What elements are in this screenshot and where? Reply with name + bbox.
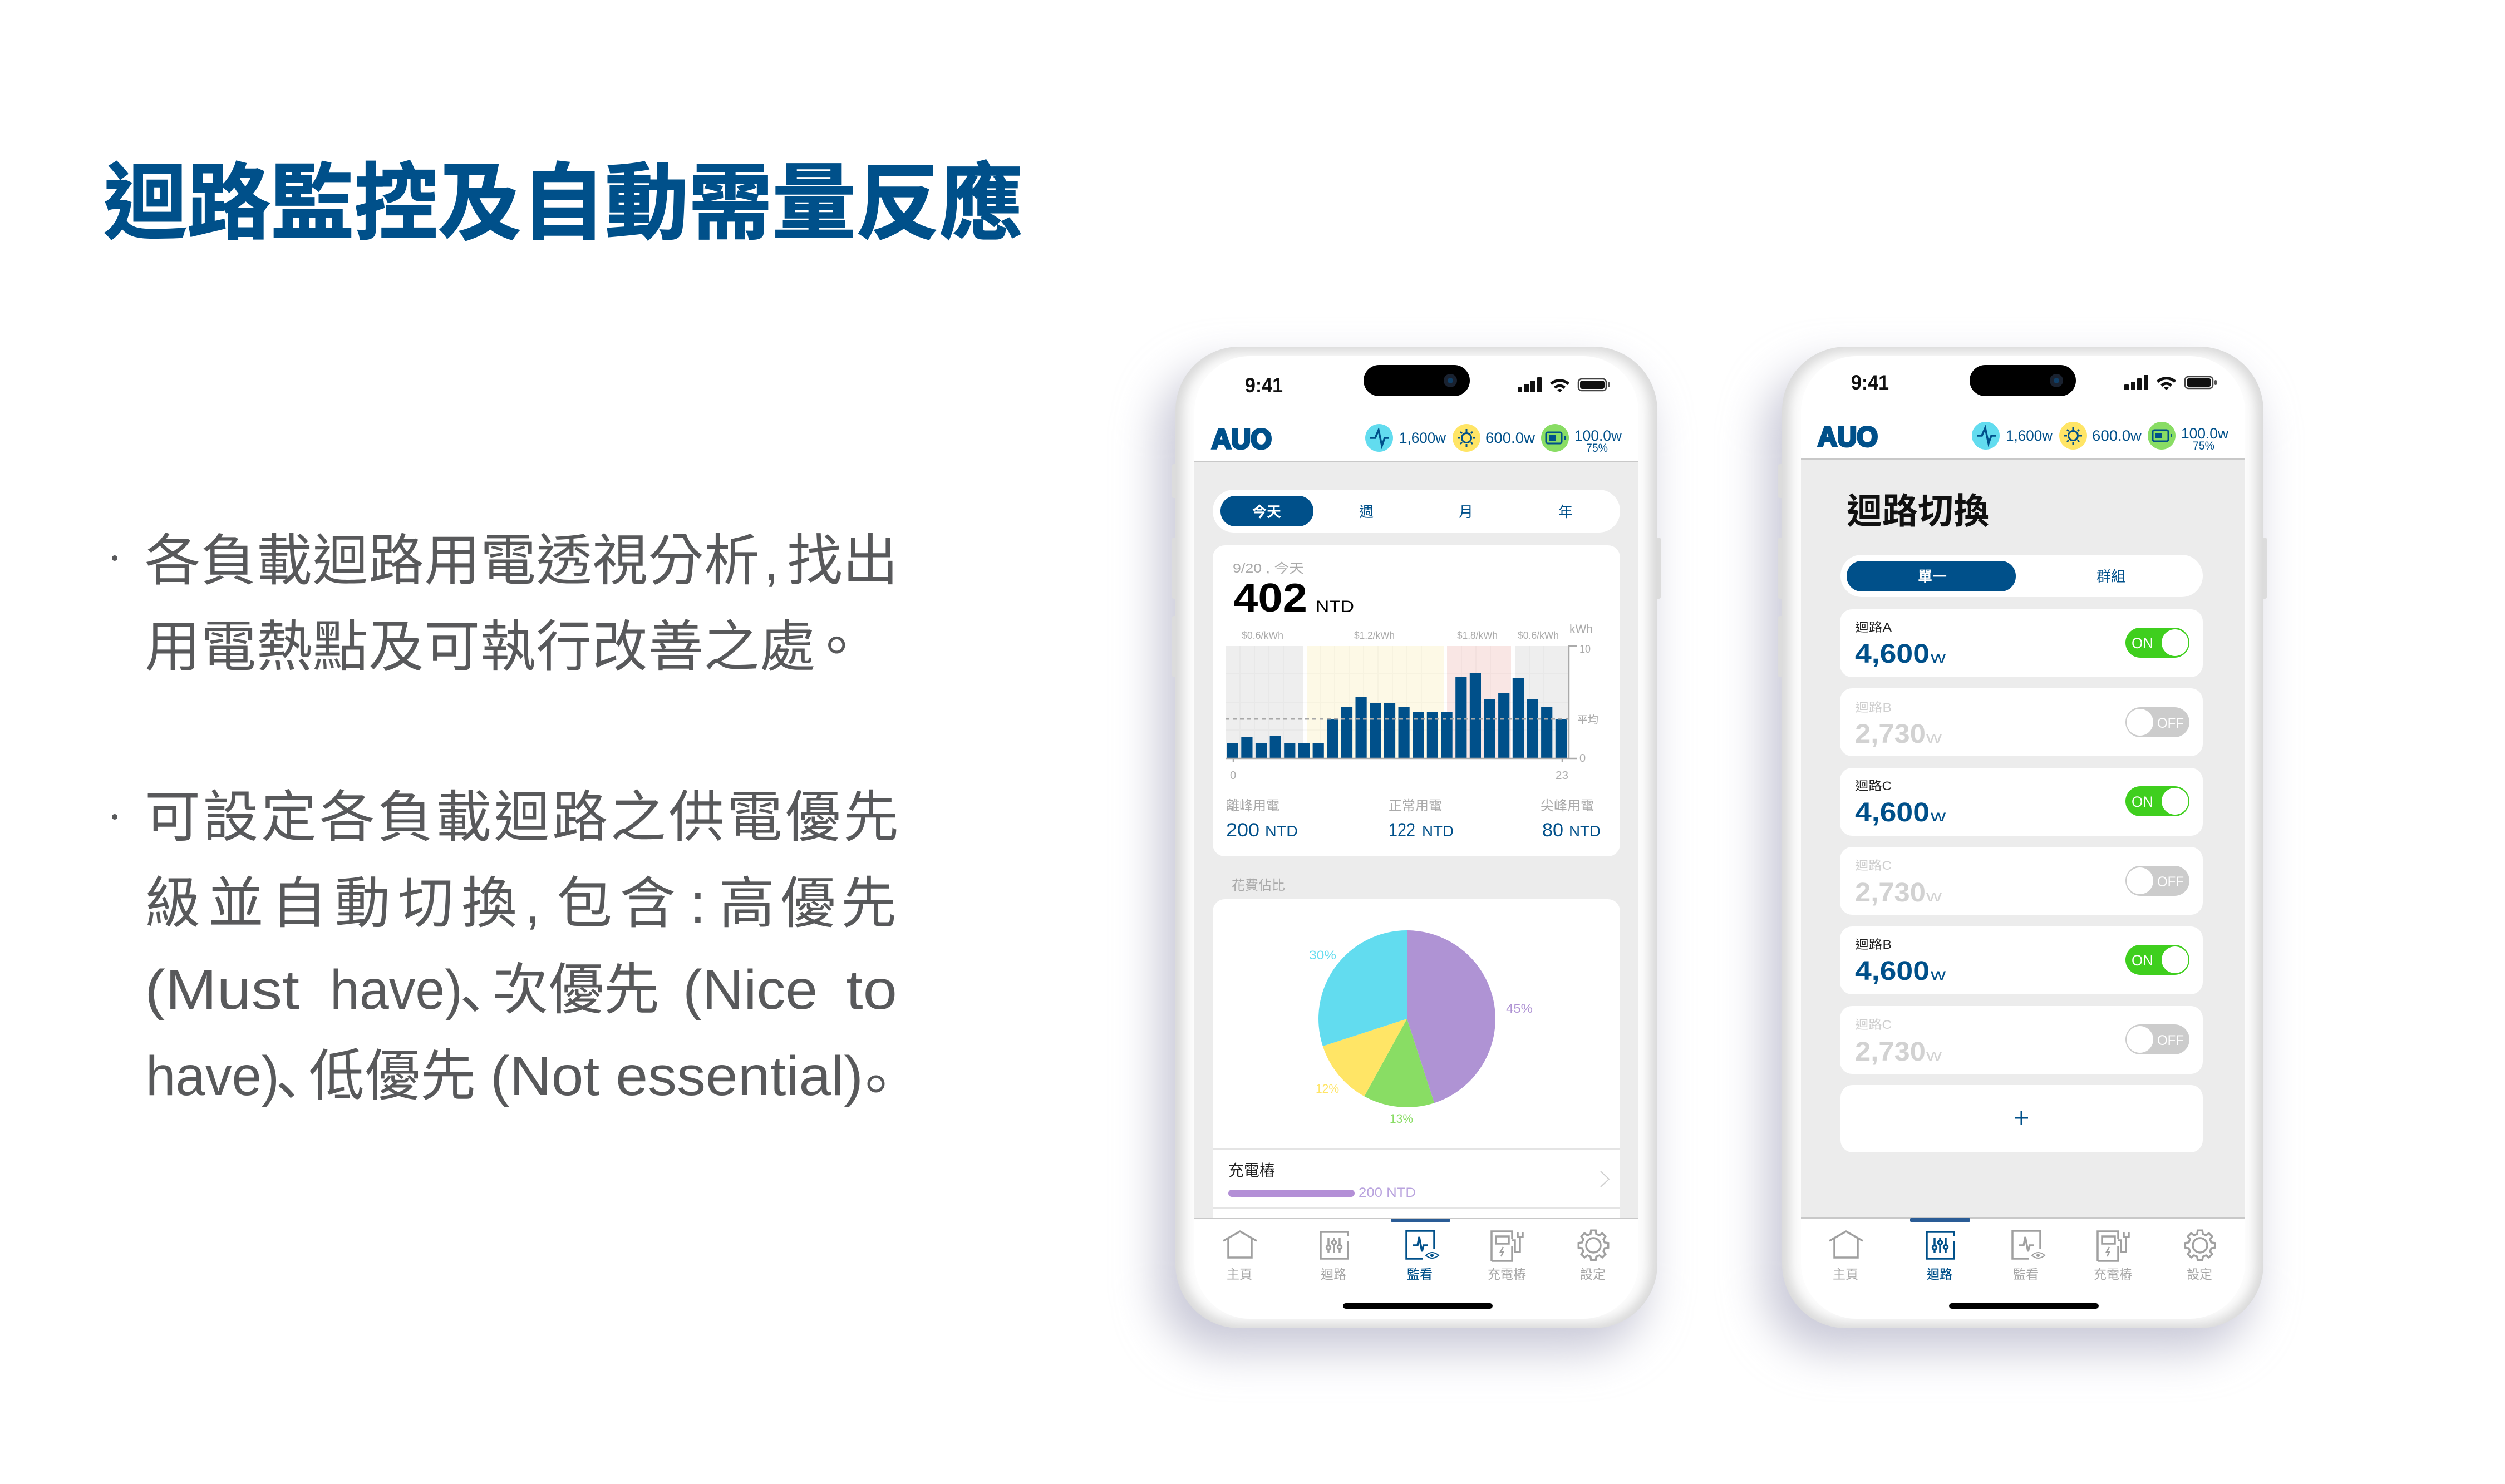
home indicator bbox=[1949, 1303, 2099, 1309]
icon: load pulse bbox=[1972, 422, 2000, 450]
bar chart: 0 bbox=[1230, 770, 1236, 782]
circuit row B off: w bbox=[1926, 728, 1942, 747]
text block: bullet two bbox=[112, 786, 902, 1111]
icon: charger bbox=[1492, 1231, 1523, 1261]
list row: charger bbox=[1213, 1148, 1620, 1209]
icon: monitor bbox=[2012, 1231, 2045, 1259]
toggle on bbox=[2125, 786, 2189, 816]
power status readouts: 1,600w bbox=[2006, 427, 2053, 444]
list row: charger: 充電樁 bbox=[1228, 1158, 1275, 1181]
content background bbox=[1801, 459, 2245, 1218]
bullet dot bbox=[112, 555, 117, 561]
single/group tabs: 群組 bbox=[2096, 565, 2125, 586]
text block: bullet two: 級並自動切換 bbox=[145, 872, 525, 935]
total cost bbox=[1233, 576, 1354, 620]
text block: bullet two: : bbox=[690, 872, 706, 935]
active indicator bbox=[1391, 1219, 1450, 1222]
cost by period: NTD bbox=[1265, 822, 1298, 840]
pie chart: 12% bbox=[1316, 1082, 1339, 1096]
icon: load pulse bbox=[1365, 424, 1393, 452]
status bar time: 9:41 bbox=[1245, 374, 1283, 397]
circuit row A bbox=[1840, 609, 2203, 677]
power status readouts: 75% bbox=[1586, 442, 1608, 455]
text block: bullet one: 。 bbox=[809, 616, 864, 678]
phone: circuit switching screen bbox=[1764, 347, 2267, 1352]
circuit row C off bbox=[1840, 847, 2203, 915]
tab labels: 迴路 bbox=[1927, 1264, 1952, 1283]
side buttons bbox=[1172, 464, 1661, 677]
text block: bullet one: 用電熱點及可執行改善之處 bbox=[145, 616, 815, 678]
screen bbox=[1194, 356, 1638, 1319]
power status readouts: 600.0w bbox=[2092, 427, 2142, 444]
price bands bbox=[1226, 646, 1303, 758]
toggle off bbox=[2125, 866, 2189, 896]
header divider bbox=[1194, 461, 1638, 462]
cost by period: 離峰用電 bbox=[1226, 795, 1279, 814]
circuit row A: w bbox=[1930, 648, 1946, 667]
icon: solar bbox=[1453, 424, 1480, 452]
single/group tabs bbox=[1840, 555, 2203, 597]
icon: settings bbox=[1578, 1230, 1608, 1260]
circuit row B on bbox=[1840, 926, 2203, 994]
pie chart bbox=[1309, 930, 1533, 1126]
text block: bullet two: 次優先 bbox=[493, 959, 660, 1021]
toggle off bbox=[2125, 707, 2189, 737]
text block: bullet two: (Nice bbox=[683, 959, 818, 1021]
toggle on: ON bbox=[2132, 952, 2153, 969]
period tabs bbox=[1213, 490, 1620, 533]
power status readouts: 1,600w bbox=[1399, 430, 1446, 446]
circuit row A: 4,600 bbox=[1855, 639, 1930, 669]
status bar time: 9:41 bbox=[1851, 371, 1889, 394]
phone shadow bbox=[1158, 367, 1647, 1352]
side buttons bbox=[1778, 464, 2267, 677]
toggle on: ON bbox=[2132, 635, 2153, 652]
bullet dot bbox=[112, 814, 117, 820]
bar chart: $0.6/kWh bbox=[1242, 630, 1283, 641]
text block: bullet two: 可設定各負載迴路之供電優先 bbox=[145, 786, 899, 849]
total cost: 402 bbox=[1233, 576, 1307, 620]
tab labels bbox=[1227, 1264, 1606, 1283]
text block: bullet one: 各負載迴路用電透視分析 bbox=[145, 530, 760, 592]
panel: cost share bbox=[1213, 899, 1620, 1219]
circuit row C bbox=[1840, 768, 2203, 836]
tab labels: 充電樁 bbox=[1488, 1264, 1526, 1283]
circuit row C off lower: 2,730 bbox=[1855, 1037, 1926, 1067]
circuit row B on: w bbox=[1930, 965, 1946, 984]
icon: monitor bbox=[1406, 1231, 1439, 1259]
infographic canvas bbox=[104, 159, 2275, 1373]
period tabs: 月 bbox=[1459, 501, 1473, 521]
circuit row C off lower bbox=[1840, 1006, 2203, 1074]
text block: bullet two: (Must bbox=[145, 959, 299, 1021]
add circuit button bbox=[1840, 1085, 2203, 1152]
tab labels: 主頁 bbox=[1227, 1264, 1252, 1283]
icon: circuits bbox=[1321, 1232, 1348, 1259]
cost by period: 122 bbox=[1389, 820, 1415, 841]
phone: monitoring screen bbox=[1158, 347, 1661, 1352]
text block: bullet two: 、 bbox=[275, 1031, 331, 1111]
icon: home bbox=[1829, 1231, 1863, 1258]
average line bbox=[1226, 718, 1568, 720]
tab labels: 充電樁 bbox=[2094, 1264, 2132, 1283]
screen bbox=[1801, 356, 2245, 1319]
icon: solar bbox=[2059, 422, 2087, 450]
period tabs: 年 bbox=[1558, 501, 1573, 521]
tab labels: 迴路 bbox=[1321, 1264, 1346, 1283]
panel: daily cost: 9/20 , 今天 bbox=[1233, 561, 1304, 575]
phone shadow bbox=[1764, 367, 2254, 1352]
tab bar bbox=[1801, 1217, 2245, 1309]
text block: bullet one bbox=[112, 530, 898, 678]
cost by period: 200 bbox=[1226, 820, 1259, 841]
toggle on bbox=[2125, 628, 2189, 658]
dynamic island bbox=[1364, 365, 1470, 396]
circuit row C off: 2,730 bbox=[1855, 878, 1926, 908]
tab labels: 監看 bbox=[1407, 1264, 1433, 1283]
phone frame bbox=[1175, 347, 1657, 1328]
icon: battery bbox=[2148, 422, 2176, 450]
circuit row B off: 2,730 bbox=[1855, 719, 1926, 749]
list row: charger: 200 NTD bbox=[1359, 1185, 1416, 1200]
toggle off: OFF bbox=[2157, 716, 2184, 731]
cost by period: NTD bbox=[1569, 822, 1601, 840]
section label: 花費佔比 bbox=[1232, 874, 1285, 894]
full stop bbox=[869, 1077, 883, 1091]
bars bbox=[1227, 673, 1567, 758]
period tabs: 今天 bbox=[1252, 501, 1281, 521]
text block: bullet two: (Not essential) bbox=[490, 1045, 863, 1107]
bar chart: $1.8/kWh bbox=[1457, 630, 1498, 641]
cost by period bbox=[1226, 795, 1601, 841]
text block: bullet two: to bbox=[846, 959, 897, 1021]
toggle on: ON bbox=[2132, 793, 2153, 810]
circuit row C off lower: w bbox=[1926, 1046, 1942, 1064]
cost by period: 80 bbox=[1542, 820, 1563, 841]
content background bbox=[1194, 462, 1638, 1219]
bar chart bbox=[1226, 622, 1598, 782]
cost by period: NTD bbox=[1422, 822, 1454, 840]
circuit row C off: w bbox=[1926, 887, 1942, 905]
text block: bullet two: have) bbox=[146, 1045, 279, 1107]
pie chart: 45% bbox=[1506, 1002, 1533, 1015]
AUO logo: AUO bbox=[1212, 423, 1272, 455]
cost by period: 正常用電 bbox=[1389, 795, 1442, 814]
text block: bullet one: 找出 bbox=[787, 530, 898, 592]
tab labels: 主頁 bbox=[1833, 1264, 1858, 1283]
circuit row B off: 迴路B bbox=[1855, 701, 1892, 714]
power status readouts: 75% bbox=[2193, 440, 2214, 452]
circuit row C: 迴路C bbox=[1855, 779, 1892, 793]
tab labels: 設定 bbox=[1580, 1264, 1606, 1283]
status icons bbox=[1518, 377, 1610, 392]
bar chart: 10 bbox=[1579, 643, 1591, 655]
text block: bullet two: 包含 bbox=[557, 872, 683, 935]
text block: bullet two: 高優先 bbox=[719, 872, 902, 935]
active indicator bbox=[1910, 1218, 1970, 1222]
icon: home bbox=[1223, 1231, 1257, 1258]
pie chart: 13% bbox=[1390, 1112, 1413, 1126]
bar chart: 23 bbox=[1556, 770, 1568, 782]
toggle off: OFF bbox=[2157, 1033, 2184, 1048]
toggle on bbox=[2125, 945, 2189, 975]
circuit row C off lower: 迴路C bbox=[1855, 1018, 1892, 1032]
tab bar bbox=[1194, 1218, 1638, 1309]
icon: settings bbox=[2185, 1230, 2215, 1260]
icon: circuits bbox=[1927, 1232, 1954, 1259]
bar chart: $1.2/kWh bbox=[1354, 630, 1395, 641]
bar chart: $0.6/kWh bbox=[1518, 630, 1559, 641]
text block: bullet two: , bbox=[525, 872, 540, 935]
toggle off: OFF bbox=[2157, 874, 2184, 890]
AUO logo: AUO bbox=[1818, 421, 1878, 452]
power status readouts: 100.0w bbox=[1574, 427, 1622, 444]
text block: bullet two: have) bbox=[330, 959, 462, 1021]
tab labels: 監看 bbox=[2013, 1264, 2039, 1283]
bar chart: 0 bbox=[1579, 752, 1586, 765]
circuit row C off: 迴路C bbox=[1855, 859, 1892, 872]
text block: bullet two: 低優先 bbox=[309, 1045, 476, 1107]
pie chart: 30% bbox=[1309, 948, 1336, 962]
dynamic island bbox=[1970, 365, 2076, 396]
circuit row B on: 迴路B bbox=[1855, 938, 1892, 951]
panel: daily cost bbox=[1213, 545, 1620, 856]
bar chart: kWh bbox=[1569, 622, 1593, 636]
circuit row B on: 4,600 bbox=[1855, 957, 1930, 986]
status icons bbox=[2124, 375, 2217, 390]
circuit row C: w bbox=[1930, 807, 1946, 825]
title: 迴路監控及自動需量反應 bbox=[104, 136, 1023, 257]
power status readouts: 600.0w bbox=[1485, 430, 1535, 446]
icon: battery bbox=[1541, 424, 1569, 452]
axes bbox=[1226, 646, 1577, 762]
power status readouts bbox=[1972, 422, 2228, 452]
power status readouts bbox=[1365, 424, 1622, 455]
total cost: NTD bbox=[1316, 598, 1354, 616]
power status readouts: 100.0w bbox=[2181, 425, 2228, 442]
header divider bbox=[1801, 458, 2245, 460]
cost by period: 尖峰用電 bbox=[1541, 795, 1594, 814]
tab labels bbox=[1833, 1264, 2212, 1283]
tab labels: 設定 bbox=[2187, 1264, 2212, 1283]
home indicator bbox=[1343, 1303, 1493, 1309]
text block: bullet two: 、 bbox=[460, 944, 515, 1025]
heading: 迴路切換 bbox=[1847, 483, 1989, 534]
bar chart: 平均 bbox=[1577, 712, 1598, 727]
single/group tabs: 單一 bbox=[1918, 565, 1947, 586]
circuit row A: 迴路A bbox=[1855, 620, 1892, 634]
toggle off bbox=[2125, 1024, 2189, 1054]
text block: bullet one: , bbox=[764, 530, 779, 592]
period tabs: 週 bbox=[1359, 501, 1374, 521]
icon: charger bbox=[2098, 1231, 2129, 1261]
phone frame bbox=[1782, 347, 2263, 1328]
circuit row B off bbox=[1840, 688, 2203, 756]
circuit row C: 4,600 bbox=[1855, 798, 1930, 827]
